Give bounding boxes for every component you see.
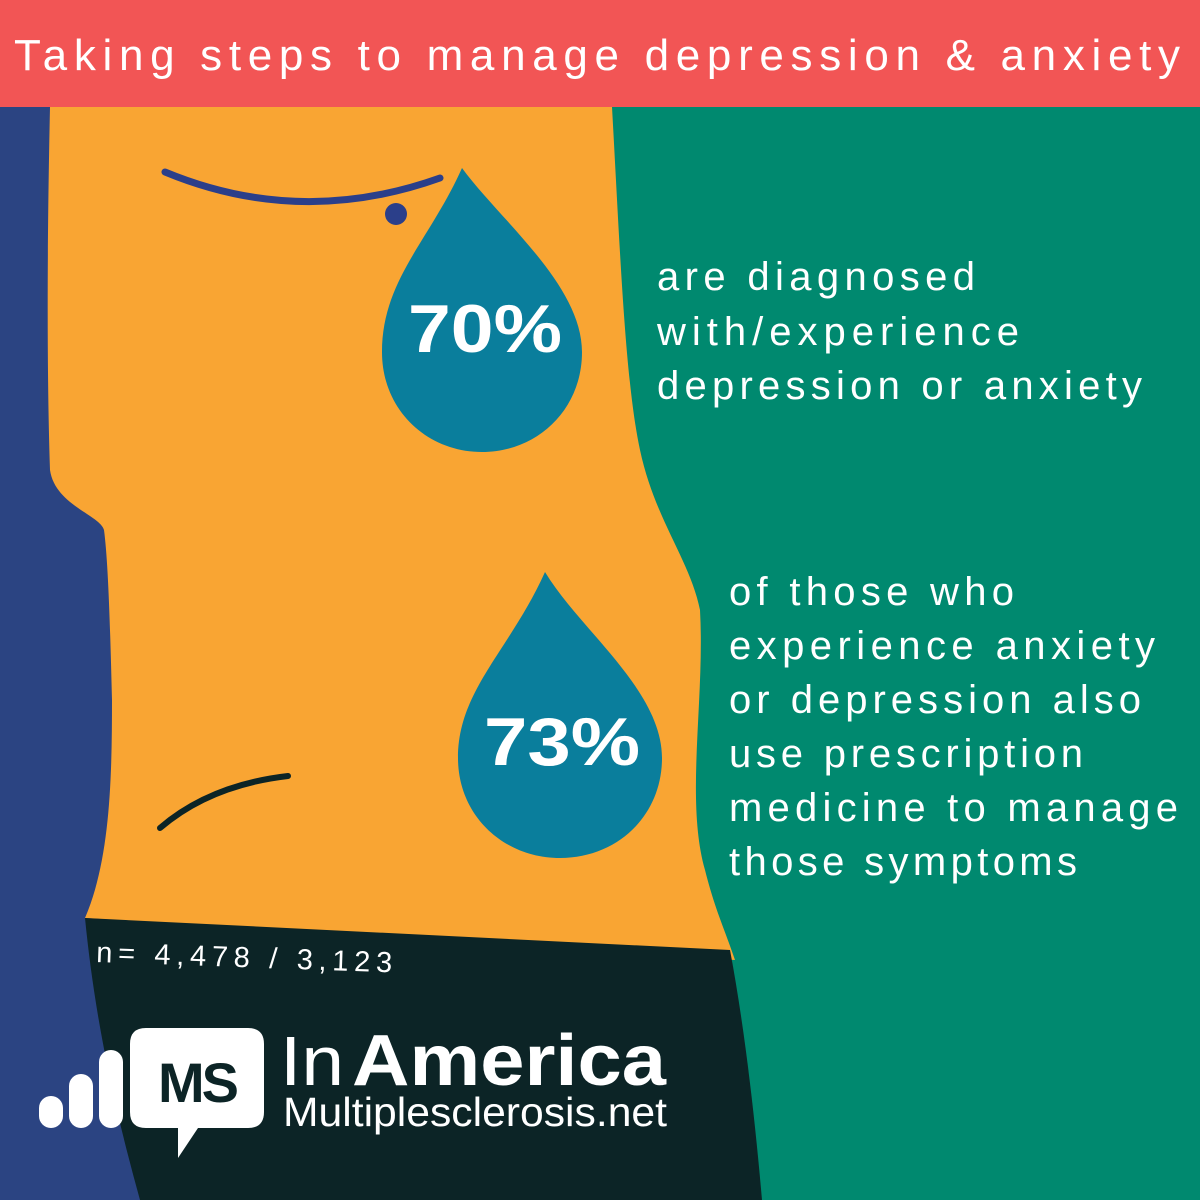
dark bottom panel [85, 918, 762, 1200]
text block: stat 1 description [656, 255, 1142, 408]
title: Taking steps to manage depression & anxiety [14, 31, 1180, 80]
logo: MS In America [39, 1021, 668, 1158]
text block: stat 2 description: medicine to manage [729, 786, 1178, 830]
drop: 70%: 70% [408, 291, 562, 367]
header bar [0, 0, 1200, 107]
drop: 73%: 73% [484, 704, 640, 780]
sample size note: n= 4,478 / 3,123 [96, 937, 393, 979]
logo: MS In America: Multiplesclerosis.net [283, 1089, 668, 1135]
text block: stat 2 description: experience anxiety [729, 624, 1155, 668]
logo: MS In America: America [352, 1021, 667, 1101]
icon: eyebrow line [165, 172, 440, 225]
background: navy left region [0, 107, 300, 1200]
text block: stat 1 description: are diagnosed [657, 255, 975, 299]
text block: stat 2 description: or depression also [729, 678, 1141, 722]
text block: stat 2 description [729, 570, 1178, 884]
text block: stat 2 description: use prescription [729, 732, 1083, 776]
text block: stat 2 description: those symptoms [729, 840, 1077, 884]
drop: 73% [458, 572, 662, 858]
logo: MS In America: In [280, 1022, 344, 1100]
text block: stat 1 description: with/experience [656, 310, 1019, 354]
icon: speech bubble [130, 1028, 264, 1158]
logo: MS In America: MS [158, 1051, 238, 1114]
face shape: orange [48, 107, 735, 960]
text block: stat 1 description: depression or anxiety [657, 364, 1142, 408]
text block: stat 2 description: of those who [729, 570, 1014, 614]
icon: mouth line [160, 776, 288, 828]
drop: 70% [382, 168, 582, 452]
icon: signal bars [39, 1050, 123, 1128]
